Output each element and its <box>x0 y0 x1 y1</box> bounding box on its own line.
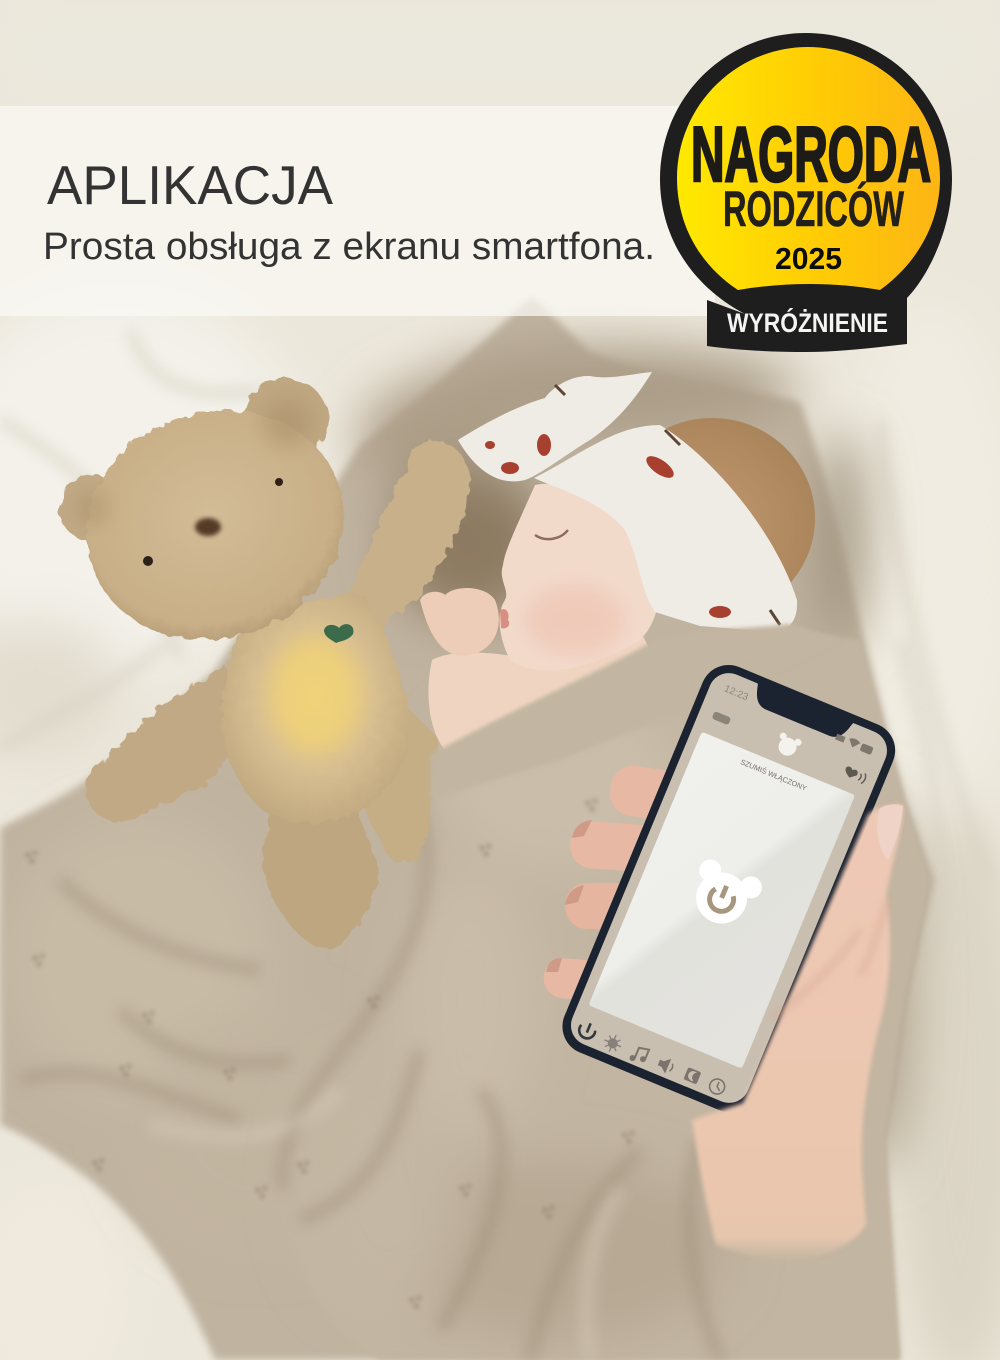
baby arm and chest <box>428 630 650 750</box>
badge black body <box>660 33 952 352</box>
phone body <box>554 656 904 1121</box>
phone screen <box>565 667 893 1109</box>
teddy eyes <box>143 478 283 566</box>
baby hand <box>420 588 499 656</box>
blanket: top layer over baby <box>20 625 930 1360</box>
badge year: 2025 <box>775 241 842 276</box>
bottom menu icons <box>576 1020 728 1098</box>
blanket: upper part behind baby and lower left <box>0 296 935 1360</box>
signal icons <box>835 732 874 755</box>
subtitle: Prosta obsługa z ekranu smartfona. <box>43 226 655 268</box>
headband with cherries <box>458 372 797 632</box>
top layer blanket edge over baby <box>430 624 840 800</box>
title: APLIKACJA <box>47 154 333 216</box>
smartphone <box>554 656 904 1121</box>
status label: SZUMIŚ WŁĄCZONY <box>739 757 808 793</box>
battery icon <box>712 711 731 725</box>
badge label: WYRÓŻNIENIE <box>727 307 888 338</box>
badge word Rodziców: RODZICÓW <box>723 181 905 237</box>
power button bear <box>682 856 765 935</box>
white translucent header band <box>0 106 715 316</box>
award badge <box>660 33 952 352</box>
badge yellow disc <box>677 47 940 290</box>
baby face <box>500 484 659 670</box>
teddy nose <box>195 518 221 536</box>
status time: 12:23 <box>722 683 750 703</box>
baby hat / hair <box>609 418 815 618</box>
bear logo small <box>773 732 803 759</box>
baby <box>420 372 815 750</box>
teddy green heart <box>324 624 353 643</box>
hand: palm and thumb over phone <box>692 804 903 1259</box>
heart sound icon <box>843 765 867 784</box>
teddy bear <box>56 377 470 949</box>
hand: fingers behind phone <box>542 763 703 1002</box>
app panel <box>588 732 855 1069</box>
blanket perforation dots <box>26 799 634 1308</box>
